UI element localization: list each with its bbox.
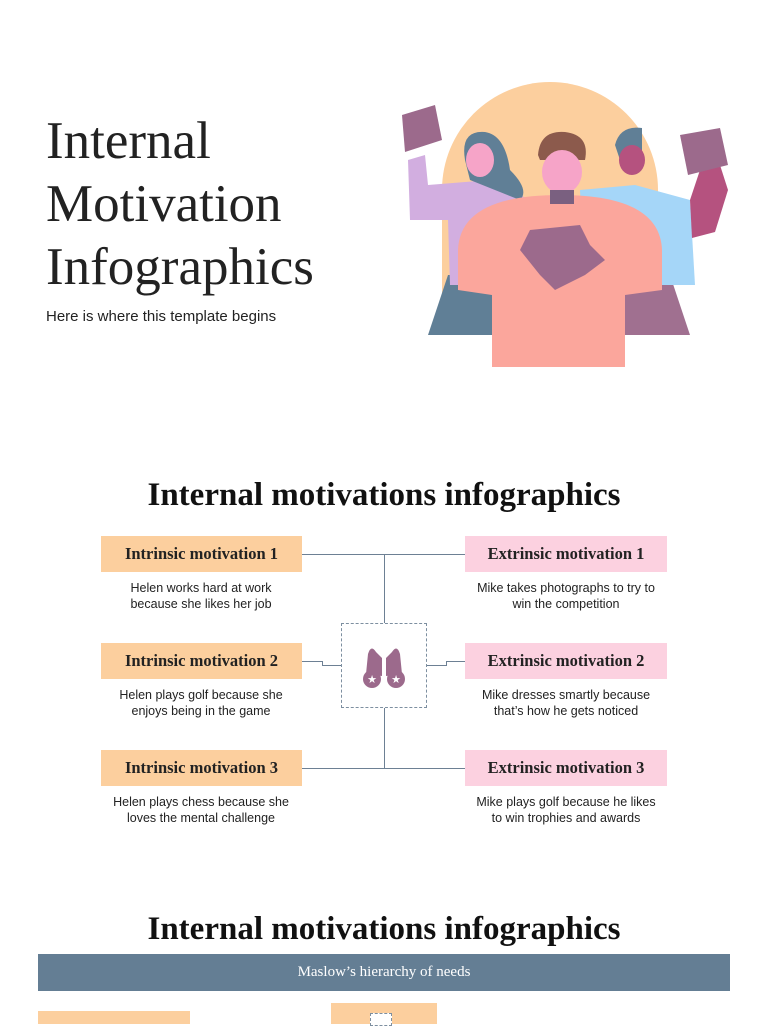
extrinsic 3	[465, 750, 667, 786]
icon: binoculars in dashed box	[341, 623, 427, 708]
banner: Maslow: Maslow’s hierarchy of needs	[298, 964, 470, 980]
title: Motivation	[46, 175, 282, 233]
text: Mike dresses smartly because	[482, 688, 650, 702]
icon: binoculars in dashed box: ★	[391, 674, 401, 686]
text: Helen plays golf because she	[119, 688, 283, 702]
text: Helen works hard at work	[130, 581, 272, 595]
subtitle: Here is where this template begins	[46, 308, 276, 325]
extrinsic 2	[465, 643, 667, 679]
banner: Maslow	[38, 954, 730, 991]
text: win the competition	[512, 597, 620, 611]
extrinsic 1	[465, 536, 667, 572]
orange block left	[38, 1011, 190, 1024]
text: to win trophies and awards	[492, 811, 640, 825]
intrinsic 2	[101, 643, 302, 679]
intrinsic 2: Intrinsic motivation 2	[125, 651, 278, 670]
section heading 1: Internal motivations infographics	[147, 477, 621, 513]
extrinsic 1: Extrinsic motivation 1	[488, 544, 644, 563]
text: enjoys being in the game	[132, 704, 270, 718]
title: Internal	[46, 112, 211, 170]
intrinsic 3	[101, 750, 302, 786]
text: Mike takes photographs to try to	[477, 581, 655, 595]
text: because she likes her job	[130, 597, 272, 611]
orange block center	[331, 1003, 437, 1024]
extrinsic 3: Extrinsic motivation 3	[488, 758, 644, 777]
illustration: team with puzzle pieces	[402, 82, 728, 367]
title	[46, 112, 314, 296]
intrinsic 1: Intrinsic motivation 1	[125, 544, 278, 563]
section heading 2: Internal motivations infographics	[147, 911, 621, 947]
intrinsic 3: Intrinsic motivation 3	[125, 758, 278, 777]
icon: binoculars in dashed box: ★	[367, 674, 377, 686]
title: Infographics	[46, 238, 314, 296]
intrinsic 1	[101, 536, 302, 572]
extrinsic 2: Extrinsic motivation 2	[488, 651, 644, 670]
text: Helen plays chess because she	[113, 795, 289, 809]
text: loves the mental challenge	[127, 811, 275, 825]
text: Mike plays golf because he likes	[476, 795, 656, 809]
text: that’s how he gets noticed	[494, 704, 638, 718]
